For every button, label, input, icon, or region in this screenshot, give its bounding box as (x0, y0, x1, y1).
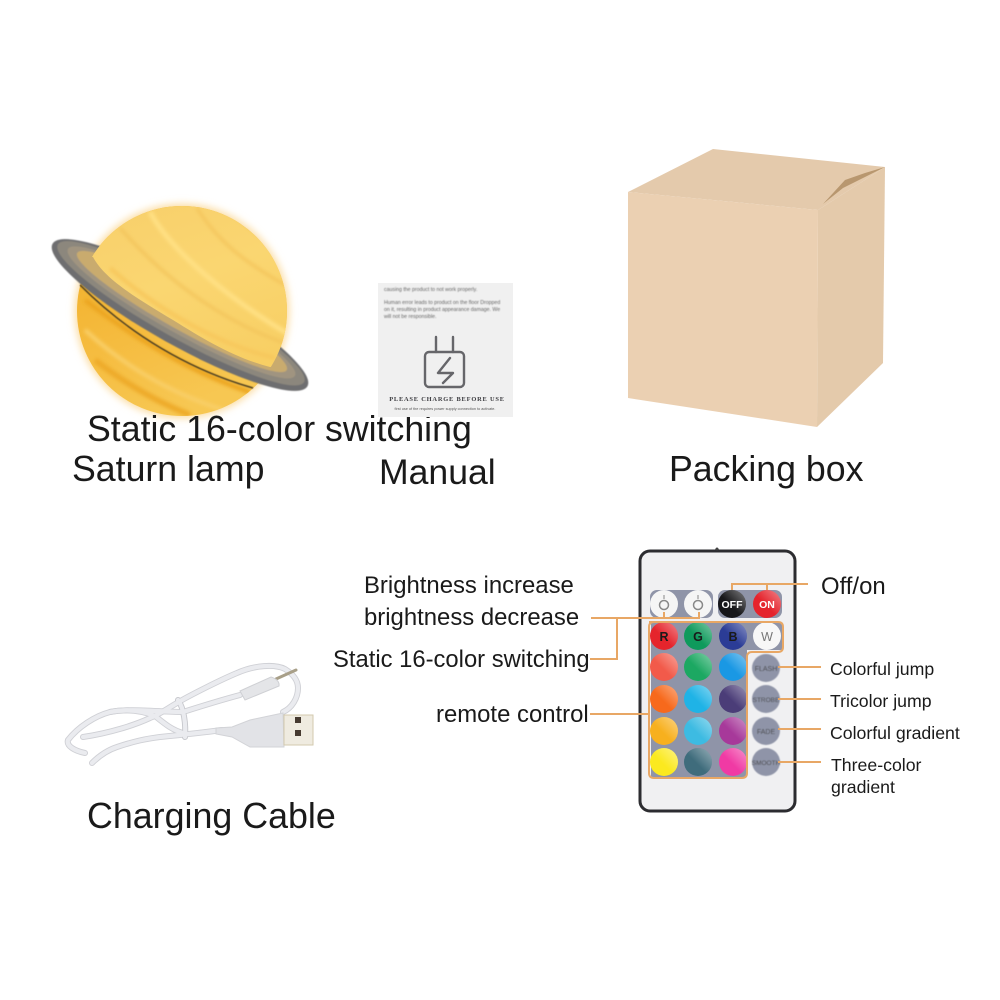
callout lines (590, 584, 821, 778)
jack plug (276, 670, 296, 679)
USB plug (216, 713, 284, 747)
RGBW letters: B (728, 630, 738, 644)
icon: Saturn lamp (38, 200, 322, 418)
text: Brightness increase: Brightness increase (364, 572, 574, 599)
text: lamp feature label: Static 16-color switching (87, 409, 472, 449)
text: Charging Cable label: Charging Cable (87, 796, 336, 836)
panel: remote control (640, 548, 795, 811)
text: Three-color gradient: Three-color (831, 755, 921, 775)
panel: manual sheet (378, 283, 513, 417)
text: manual footnote: first use of the requires power supply connection to activate. (395, 407, 495, 411)
RGBW letters: R (659, 630, 669, 644)
off and on buttons: OFF (722, 599, 743, 611)
text: Packing box label: Packing box (669, 449, 864, 489)
RGBW letters: G (693, 630, 703, 644)
RGBW letters: W (761, 630, 773, 644)
icon: charging cable (68, 666, 313, 763)
mode buttons: SMOOTH (752, 760, 781, 767)
colour buttons grid (650, 622, 781, 776)
RGBW letters (659, 630, 773, 644)
mode buttons: STROBE (753, 697, 780, 704)
text: Colorful jump: Colorful jump (830, 659, 934, 679)
text: Saturn lamp label: Saturn lamp (72, 449, 264, 489)
icon: packing box (628, 149, 885, 427)
off and on buttons (718, 590, 781, 618)
text: manual fine print (384, 287, 500, 320)
text: Off/on label: Off/on (821, 573, 886, 600)
text: Static switching label: Static 16-color switching (333, 646, 590, 673)
text: remote control label: remote control (436, 701, 589, 728)
text: manual fine print: on it, resulting in product appearance damage. We (384, 307, 500, 313)
text: Tricolor jump: Tricolor jump (830, 691, 932, 711)
text: manual fine print: causing the product to not work properly. (384, 287, 477, 293)
text: Three-color gradient: gradient (831, 777, 895, 797)
button highlights (650, 590, 781, 776)
icon: charging plug (425, 337, 464, 387)
brightness buttons (650, 590, 712, 618)
text: brightness decrease: brightness decrease (364, 604, 579, 631)
text: Colorful gradient: Colorful gradient (830, 723, 960, 743)
off and on buttons: ON (759, 599, 775, 611)
mode buttons (752, 654, 781, 776)
text: Manual label: Manual (379, 452, 496, 492)
text: manual fine print: will not be responsible. (384, 314, 436, 320)
text: please charge before use: PLEASE CHARGE BEFORE USE (389, 396, 505, 403)
text: manual fine print: Human error leads to product on the floor Dropped (384, 300, 500, 306)
button groups (650, 590, 782, 777)
mode buttons: FADE (757, 729, 775, 736)
mode buttons: FLASH (755, 666, 777, 673)
